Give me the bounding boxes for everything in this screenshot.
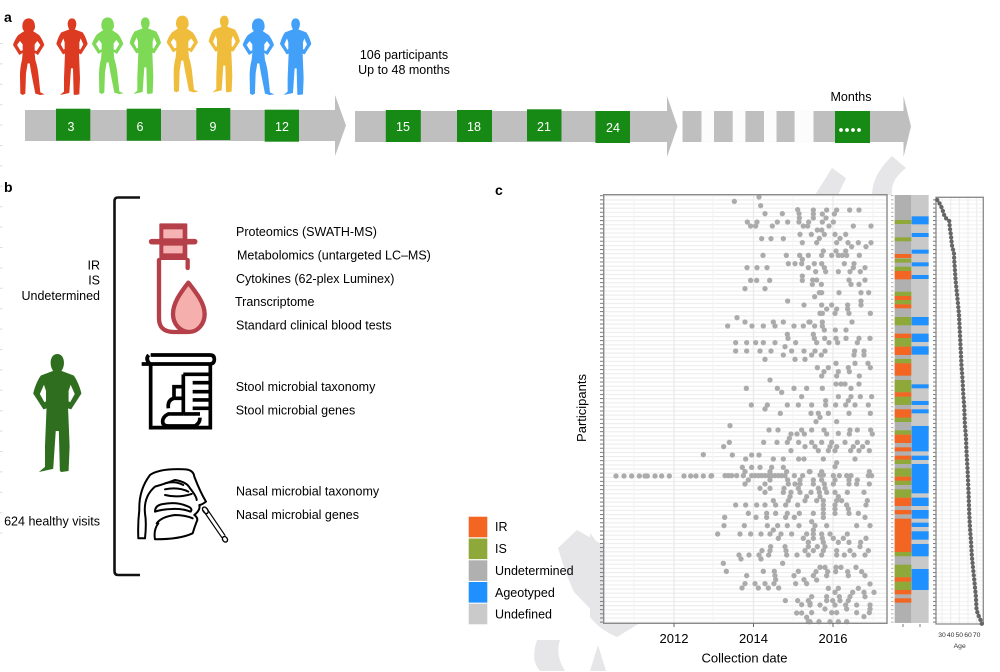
timeline arrow 1: 6	[137, 120, 144, 134]
age axis labels: 50	[956, 632, 963, 639]
nasal labels: Nasal microbial genes	[236, 508, 359, 522]
timeline arrow 2: 21	[537, 120, 551, 134]
panel label a: a	[4, 9, 12, 25]
omics labels	[235, 225, 431, 332]
annotation heatmap strips	[891, 195, 929, 627]
omics labels: Metabolomics (untargeted LC–MS)	[237, 248, 431, 262]
nasal labels	[236, 484, 380, 522]
stool labels: Stool microbial genes	[236, 404, 355, 418]
age axis labels: 30	[938, 632, 946, 639]
icon: blood tube and drop	[152, 223, 205, 332]
x axis tick labels: 2012	[660, 631, 688, 646]
omics labels: Transcriptome	[235, 295, 314, 309]
status labels	[21, 258, 100, 303]
panel label c: c	[495, 182, 503, 198]
timeline arrow 1	[25, 95, 346, 156]
timeline arrow 1: 3	[68, 120, 75, 134]
legend: Undetermined	[495, 564, 574, 578]
stool labels	[236, 380, 376, 418]
follow-up note: Up to 48 months	[358, 63, 450, 77]
status labels: Undetermined	[21, 289, 100, 303]
omics labels: Proteomics (SWATH-MS)	[236, 225, 377, 239]
age axis labels: 70	[973, 632, 981, 639]
healthy individual silhouette	[33, 354, 81, 472]
status labels: IR	[88, 258, 100, 272]
participants note: 106 participants	[360, 48, 448, 62]
omics labels: Standard clinical blood tests	[236, 318, 392, 332]
legend: Ageotyped	[495, 586, 555, 600]
icon: stool sample container	[142, 355, 214, 428]
months label: Months	[830, 90, 872, 104]
age plot	[933, 197, 983, 624]
status labels: IS	[88, 274, 100, 288]
timeline arrow 2: 18	[467, 120, 481, 134]
watermark fragments	[534, 156, 906, 671]
age axis labels	[938, 632, 981, 650]
x axis tick labels: 2014	[739, 631, 768, 646]
y axis title: Participants	[574, 374, 589, 442]
legend: IR	[495, 520, 508, 534]
x axis tick labels: 2016	[819, 631, 847, 646]
x axis tick labels	[660, 631, 847, 646]
panel label b: b	[4, 179, 13, 195]
legend	[469, 517, 574, 624]
bracket	[114, 198, 140, 575]
stool labels: Stool microbial taxonomy	[236, 380, 376, 394]
age axis labels: 60	[964, 632, 972, 639]
age axis labels: 40	[947, 632, 955, 639]
timeline arrow 2: 15	[396, 120, 410, 134]
healthy visits label: 624 healthy visits	[4, 514, 100, 528]
participants silhouettes	[13, 16, 311, 95]
timeline arrow 2: 24	[606, 121, 620, 135]
nasal labels: Nasal microbial taxonomy	[236, 484, 380, 498]
timeline arrow 1: 9	[210, 120, 217, 134]
legend: Undefined	[495, 608, 552, 622]
dot plot: collection dates per participant	[600, 195, 887, 627]
legend: IS	[495, 542, 507, 556]
age axis labels: Age	[954, 643, 966, 650]
omics labels: Cytokines (62-plex Luminex)	[236, 272, 394, 286]
timeline arrow 1: 12	[275, 120, 289, 134]
timeline arrow 2	[355, 96, 678, 157]
x axis title: Collection date	[702, 650, 788, 666]
timeline arrow 3	[682, 96, 911, 157]
icon: nasal cavity and swab	[138, 469, 229, 543]
